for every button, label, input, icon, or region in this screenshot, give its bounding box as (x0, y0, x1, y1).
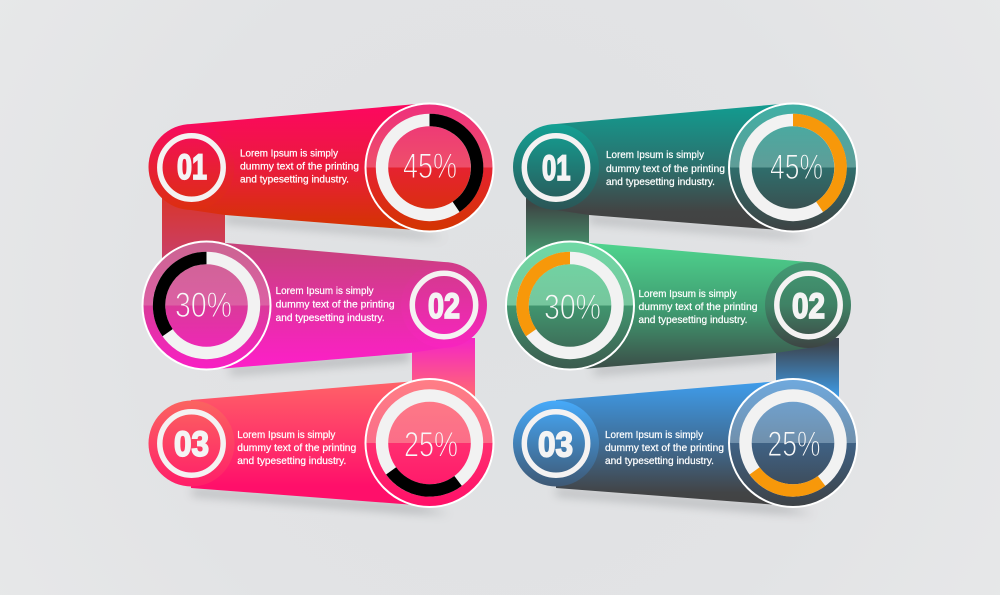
text: row 1 (240, 148, 359, 186)
text: row 2: dummy text of the printing (638, 302, 758, 313)
badge: 03: 03 (174, 425, 209, 464)
badge: 03 (148, 400, 234, 486)
text: row 3: and typesetting industry. (605, 456, 714, 467)
text: row 1: Lorem Ipsum is simply (240, 148, 339, 160)
gauge: 45%: 45% (770, 148, 823, 187)
badge: 01 (148, 124, 234, 210)
text: row 1 (606, 150, 725, 188)
badge: 02: 02 (428, 287, 460, 326)
badge: 02 (765, 262, 851, 348)
text: row 1: Lorem Ipsum is simply (606, 150, 705, 161)
text: row 1: and typesetting industry. (606, 177, 715, 188)
badge: 01: 01 (542, 149, 570, 188)
badge: 02 (401, 262, 487, 348)
band: row 1 (191, 103, 428, 231)
gauge: 45% (729, 104, 857, 232)
band: row 3 (191, 380, 428, 506)
badge: 01: 01 (177, 148, 207, 187)
text: row 2: and typesetting industry. (276, 313, 385, 324)
gauge: 25%: 25% (768, 425, 820, 464)
text: row 2 (276, 286, 395, 324)
text: row 3: dummy text of the printing (237, 443, 357, 454)
badge: 03 (513, 400, 599, 486)
text: row 2: and typesetting industry. (638, 315, 748, 326)
text: row 3: and typesetting industry. (237, 456, 346, 467)
text: row 3: Lorem Ipsum is simply (237, 430, 336, 441)
text: row 2 (638, 289, 758, 326)
gauge: 30%: 30% (175, 286, 232, 325)
text: row 2: Lorem Ipsum is simply (276, 286, 374, 297)
gauge: 30%: 30% (544, 288, 601, 327)
band: row 3 (556, 380, 792, 506)
band shadows (192, 216, 814, 514)
connector: 02 to 25% (412, 338, 475, 398)
badge: 01 (513, 124, 599, 210)
connector: 01 to 30% (526, 198, 589, 264)
gauge: 25% (729, 379, 857, 507)
panel: warm infographic (left) (142, 103, 494, 507)
gauge: 25% (366, 379, 494, 507)
text: row 3: Lorem Ipsum is simply (605, 430, 704, 441)
text: row 2: Lorem Ipsum is simply (638, 289, 737, 300)
text: row 3 (605, 430, 724, 467)
text: row 1: dummy text of the printing (606, 164, 725, 175)
connector: 01 to 30% (162, 198, 225, 264)
gauge: 30% (506, 242, 634, 370)
text: row 1: and typesetting industry. (240, 174, 349, 186)
text: row 2: dummy text of the printing (276, 300, 395, 310)
text: row 3: dummy text of the printing (605, 443, 724, 454)
badge: 02: 02 (792, 287, 825, 326)
gauge: 45%: 45% (403, 147, 457, 186)
text: row 1: dummy text of the printing (240, 162, 359, 172)
band: row 1 (556, 103, 792, 231)
badge: 03: 03 (538, 426, 573, 464)
connector: 02 to 25% (776, 338, 839, 398)
panel: cool infographic (right) (506, 103, 857, 507)
gauge: 25%: 25% (404, 426, 458, 464)
gauge: 45% (366, 104, 494, 232)
text: row 3 (237, 430, 357, 467)
band: row 2 (206, 241, 444, 370)
gauge: 30% (142, 242, 270, 370)
band: row 2 (570, 241, 808, 370)
